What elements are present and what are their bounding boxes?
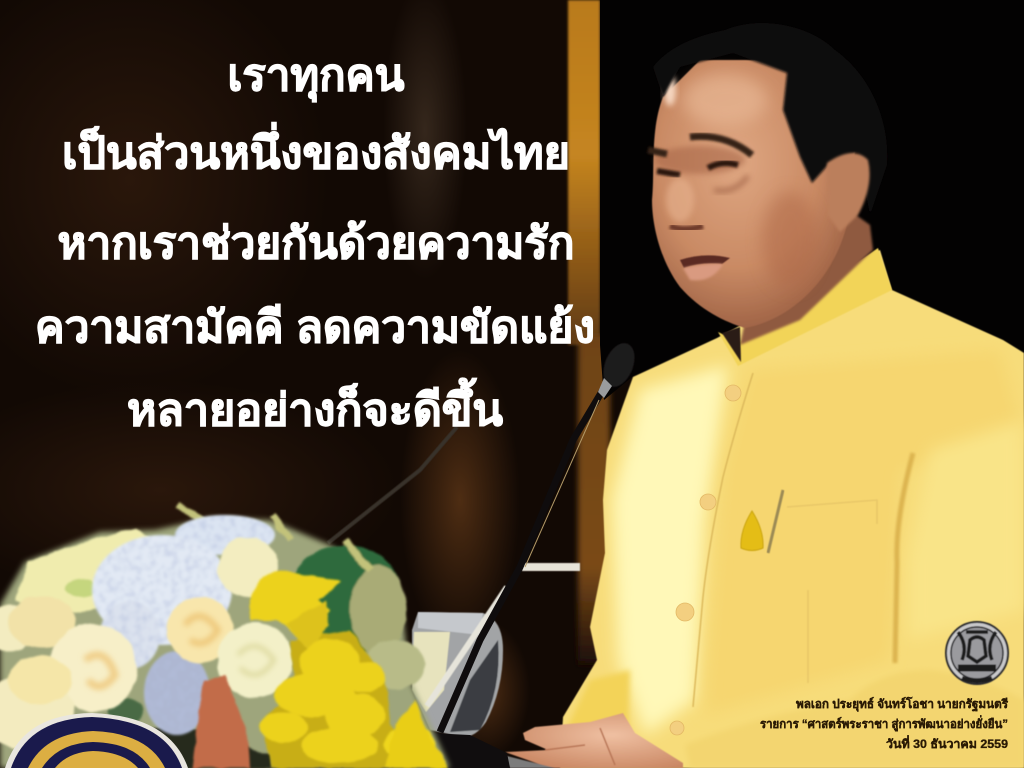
eyes — [657, 163, 738, 175]
royal pin — [741, 511, 763, 550]
quote heading: เราทุกคน — [228, 51, 404, 103]
flower arrangement — [0, 505, 450, 768]
podium emblem — [5, 713, 188, 768]
quote heading: เป็นส่วนหนึ่งของสังคมไทย — [62, 122, 570, 178]
pen — [768, 490, 783, 553]
flower mass base — [0, 518, 450, 768]
silver bar — [522, 563, 580, 571]
jacket collar — [718, 248, 892, 366]
breast pocket — [787, 500, 877, 683]
hydrangea blooms — [92, 515, 275, 735]
pale yellow peonies — [15, 528, 160, 615]
person: yellow jacket — [560, 248, 1024, 768]
water glass — [412, 587, 507, 737]
yellow orchids — [250, 571, 448, 768]
quote heading: หลายอย่างก็จะดีขึ้น — [127, 377, 503, 435]
roses — [0, 537, 293, 750]
quote heading: หากเราช่วยกันด้วยความรัก — [58, 219, 574, 268]
source caption — [760, 696, 1009, 751]
nose — [670, 226, 703, 229]
source caption: พลเอก ประยุทธ์ จันทร์โอชา นายกรัฐมนตรี — [796, 696, 1009, 712]
source caption: วันที่ 30 ธันวาคม 2559 — [886, 735, 1008, 751]
rose petal details — [85, 616, 274, 686]
sleeve seam — [895, 453, 913, 663]
quote heading — [35, 51, 595, 435]
quote heading: ความสามัคคี ลดความขัดแย้ง — [35, 303, 595, 352]
microphone — [440, 338, 641, 732]
podium base — [425, 733, 510, 768]
buttons — [670, 385, 741, 735]
second microphone stand — [328, 427, 457, 543]
hands — [503, 713, 683, 768]
jacket placket seam — [693, 373, 753, 707]
salmon astilbe — [192, 675, 250, 768]
jacket shading — [566, 350, 1024, 768]
ear — [827, 153, 870, 232]
mouth — [680, 255, 730, 268]
source caption: รายการ “ศาสตร์พระราชา สู่การพัฒนาอย่างยั่งยืน” — [760, 715, 1008, 732]
person: head and face — [648, 23, 887, 362]
eyebrows — [648, 136, 752, 155]
government seal icon — [946, 622, 1008, 684]
greenery — [107, 505, 425, 768]
